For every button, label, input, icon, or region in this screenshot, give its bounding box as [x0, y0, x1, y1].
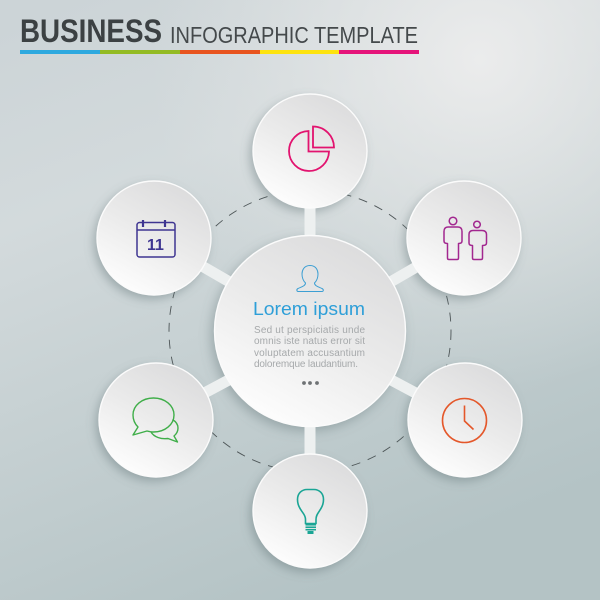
icon: light bulb [298, 490, 324, 534]
body text: Sed ut perspiciatis unde [254, 325, 365, 336]
colored title rule [20, 50, 419, 54]
title [20, 13, 418, 49]
body text: omnis iste natus error sit [254, 336, 365, 347]
node: light bulb [253, 454, 367, 568]
body text: voluptatem accusantium [254, 348, 365, 359]
node: people [407, 181, 521, 295]
icon: user [297, 266, 323, 292]
icon: people [444, 217, 486, 260]
title: BUSINESS [20, 13, 162, 49]
node: clock [408, 363, 522, 477]
icon: calendar: 11 [147, 237, 164, 254]
connector spokes [195, 200, 425, 465]
heading: Lorem ipsum [253, 299, 365, 319]
body text [254, 325, 365, 370]
icon: clock [442, 398, 486, 442]
node: speech bubbles [99, 363, 213, 477]
icon: speech bubbles [133, 398, 178, 442]
node: pie chart [253, 94, 367, 208]
body text: doloremque laudantium. [254, 359, 358, 370]
dashed orbit ring [169, 190, 451, 472]
node: calendar [97, 181, 211, 295]
central panel [214, 236, 406, 426]
icon: pie chart [289, 126, 334, 171]
title: INFOGRAPHIC TEMPLATE [170, 22, 418, 48]
ellipsis dots [302, 381, 319, 385]
